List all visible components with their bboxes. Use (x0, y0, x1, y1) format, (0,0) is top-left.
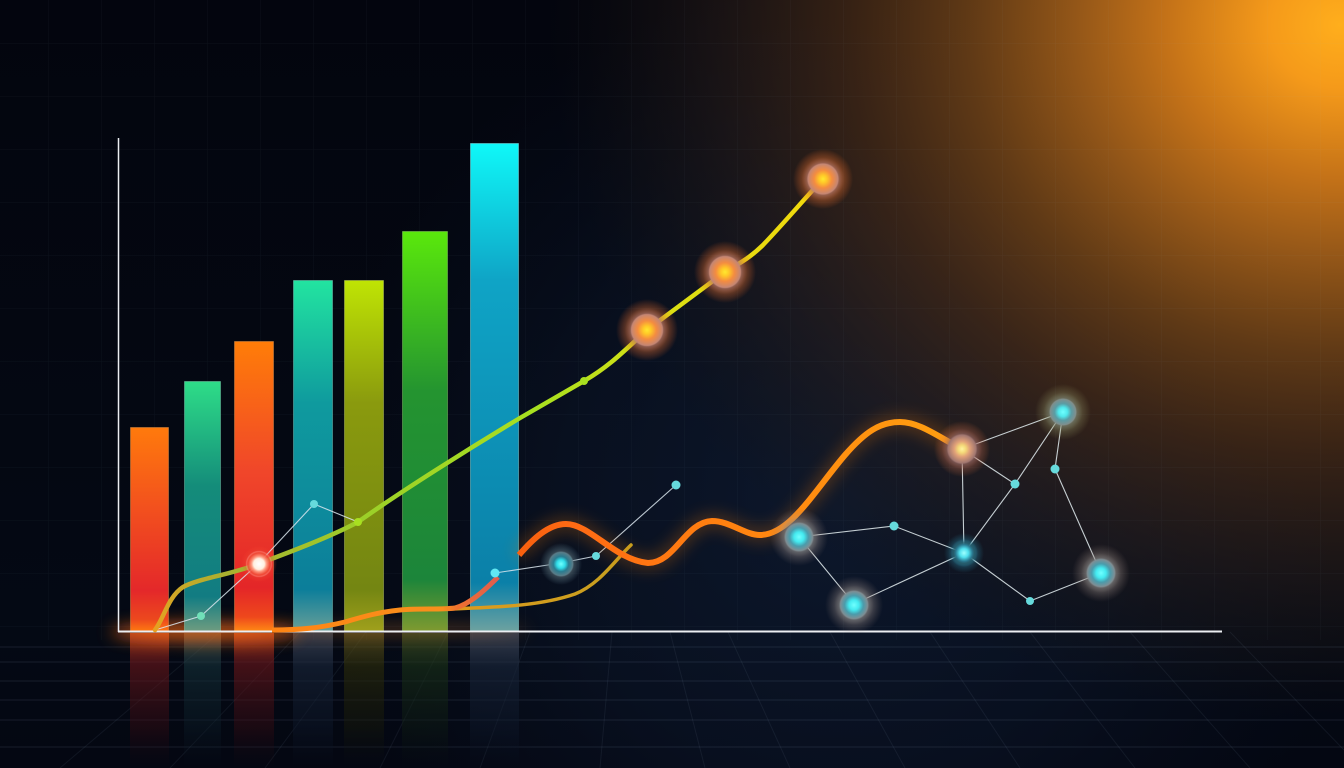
node (770, 508, 828, 566)
thin network line: left (155, 485, 676, 630)
node (616, 299, 678, 361)
bar 6 (402, 232, 448, 632)
axes (118, 138, 1222, 632)
bar 4 (294, 280, 332, 632)
bar 7 (470, 144, 518, 632)
floor grid (0, 632, 1344, 768)
axis glow (110, 623, 530, 641)
bar 3 (234, 342, 274, 632)
node (540, 543, 582, 585)
small dots (197, 464, 1060, 620)
orange line (519, 422, 962, 563)
gold line (450, 545, 631, 609)
bar 1 (130, 428, 168, 632)
small node (580, 377, 588, 385)
node (1072, 544, 1130, 602)
network lines: right (799, 412, 1101, 604)
node (934, 421, 990, 477)
glowing nodes on green line (241, 149, 853, 582)
node (1035, 384, 1091, 440)
node (241, 546, 277, 582)
node (793, 149, 853, 209)
bar 5 (344, 280, 384, 632)
bar 2 (184, 382, 220, 632)
node (694, 241, 756, 303)
node (825, 576, 883, 634)
green growth line (155, 179, 823, 630)
small node (354, 518, 362, 526)
low orange line (272, 577, 498, 630)
bar chart (130, 144, 518, 632)
network nodes (197, 384, 1130, 634)
bar reflections (130, 633, 519, 768)
node (944, 533, 984, 573)
